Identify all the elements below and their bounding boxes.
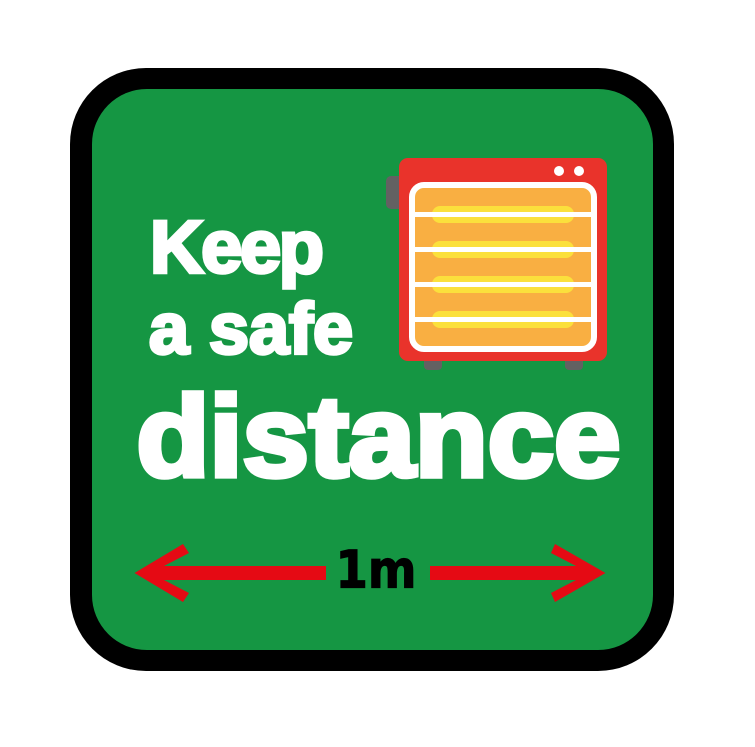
heater indicator lights (554, 166, 584, 176)
heater feet (424, 355, 583, 370)
heater handle (386, 176, 406, 209)
heating elements (432, 206, 574, 328)
heading: Keep: Keep (150, 206, 324, 288)
heater window (412, 185, 594, 349)
heading: distance: distance (136, 374, 620, 501)
heater body (399, 158, 607, 361)
arrow: right (430, 544, 606, 602)
label: 1m: 1m (336, 540, 416, 600)
arrow: left (134, 544, 326, 602)
icon: electric heater (386, 158, 607, 370)
guard bars (413, 212, 593, 322)
sign panel: black border and green field (70, 68, 674, 671)
heading: a safe: a safe (149, 290, 353, 370)
